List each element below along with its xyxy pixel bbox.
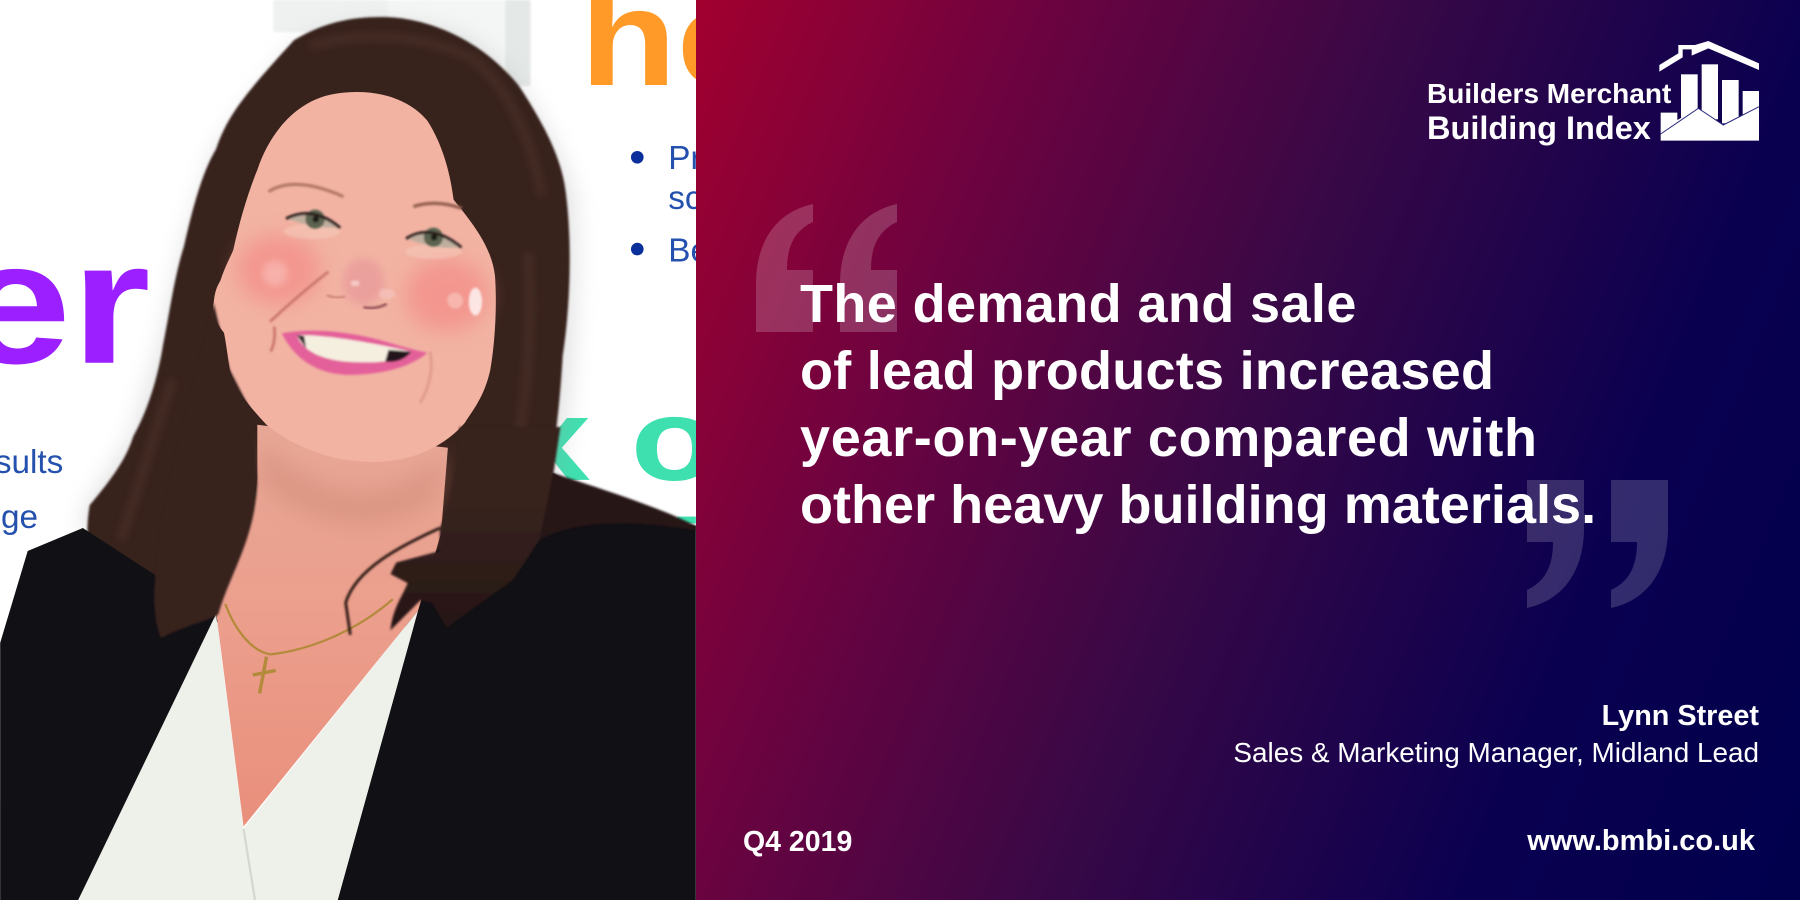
face [213,92,496,462]
mouth [282,331,427,375]
right cheek highlights [447,288,482,316]
attribution role: Sales & Marketing Manager, Midland Lead [1233,737,1759,768]
quote text: year-on-year compared with [800,408,1538,468]
backdrop: grey wall shapes [273,0,531,86]
left cheek [237,235,320,305]
nose [327,258,395,308]
right hair mass over shoulder [346,427,696,635]
backdrop lettering: small blue text [0,140,709,536]
website: www.bmbi.co.uk [1527,825,1755,857]
logo wordmark: Builders Merchant [1427,78,1671,109]
left hair front lock [154,303,257,638]
neck and chest [216,425,448,827]
left eye [283,210,340,239]
logo house mark [1659,41,1759,141]
quote text [800,274,1596,535]
quote text: The demand and sale [800,274,1357,334]
icon: opening quotation mark [756,204,897,332]
eyebrows [268,184,462,208]
right eye [405,228,462,259]
blouse [78,611,418,900]
hair highlights [121,37,542,540]
icon: closing quotation mark [1527,480,1668,608]
blazer right [338,473,696,900]
necklace [225,599,393,693]
backdrop lettering: small blue text: ge [1,499,38,536]
green fragment [677,517,696,523]
logo wordmark [1427,78,1671,146]
panel: gradient quote background [696,0,1800,900]
hair [87,17,570,638]
neck shadow [260,442,446,525]
panel: portrait photo [0,0,696,900]
soft hair shadow [81,24,575,643]
right cheek [405,258,488,332]
facial features [237,184,488,403]
smile folds [270,272,431,403]
blouse collar crease [244,829,255,900]
quote text: other heavy building materials. [800,475,1596,535]
logo wordmark: Building Index [1427,110,1651,146]
quote text: of lead products increased [800,341,1494,401]
logo: Builders Merchant Building Index [1427,41,1759,146]
date label: Q4 2019 [743,826,852,858]
left cheek highlight [262,261,288,286]
attribution name: Lynn Street [1602,700,1759,732]
blazer left [0,528,218,900]
